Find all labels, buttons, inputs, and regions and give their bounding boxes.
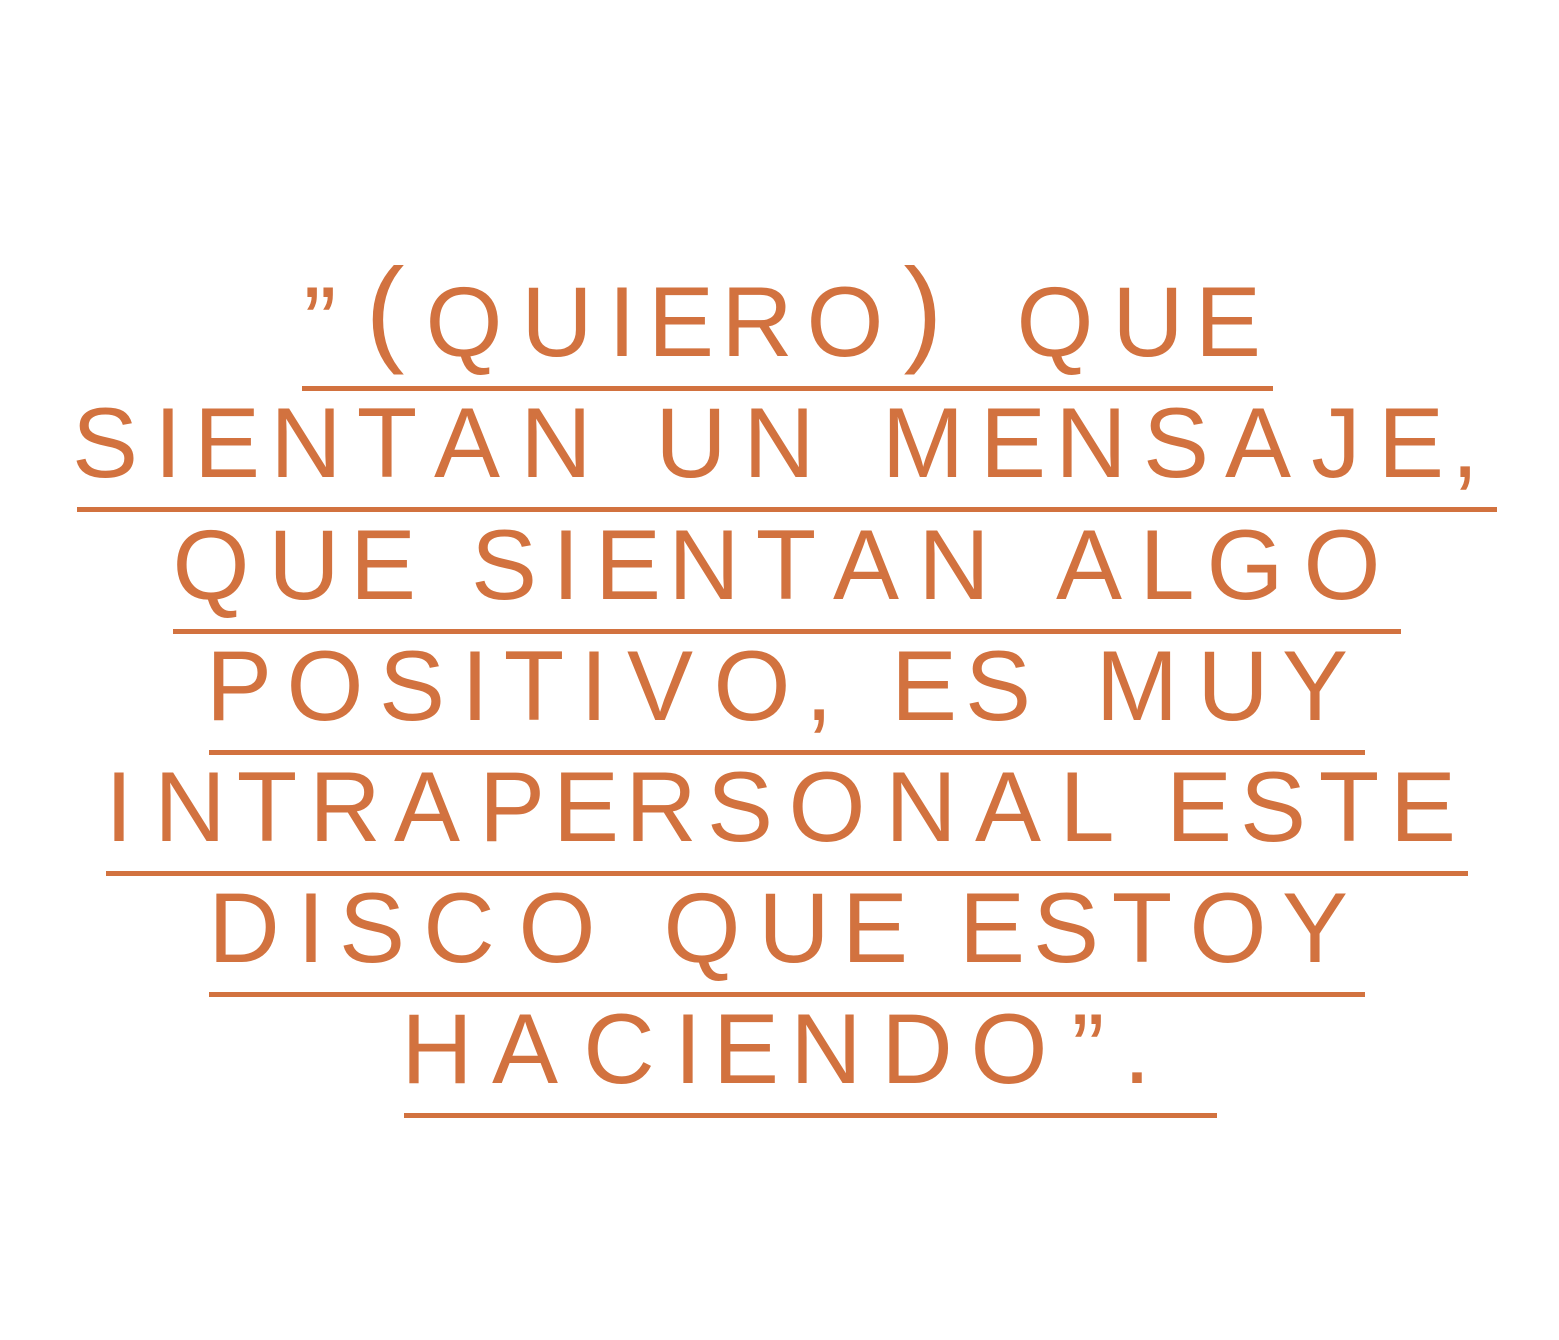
quote line 1: (QUIERO) QUE [302, 244, 1273, 391]
quote line 1: (QUIERO) QUE: ” [304, 266, 336, 377]
quote line 1: (QUIERO) QUE: ) [904, 244, 942, 375]
quote line 1: (QUIERO) QUE: QUE [1016, 266, 1261, 377]
quote line 1: (QUIERO) QUE: ( [366, 244, 405, 375]
quote line 1: (QUIERO) QUE: QUIERO [425, 266, 884, 377]
quote line 4: POSITIVO, ES MUY: POSITIVO, ES MUY [206, 630, 1348, 741]
quote line 3: QUE SIENTAN ALGO: QUE SIENTAN ALGO [172, 509, 1381, 620]
quote line 6: DISCO QUE ESTOY: DISCO QUE ESTOY [208, 872, 1348, 983]
quote line 5: INTRAPERSONAL ESTE: INTRAPERSONAL ESTE [105, 751, 1456, 862]
quote line 2: SIENTAN UN MENSAJE,: SIENTAN UN MENSAJE, [72, 387, 1479, 498]
quote line 7: HACIENDO”.: HACIENDO”. [401, 993, 1151, 1104]
